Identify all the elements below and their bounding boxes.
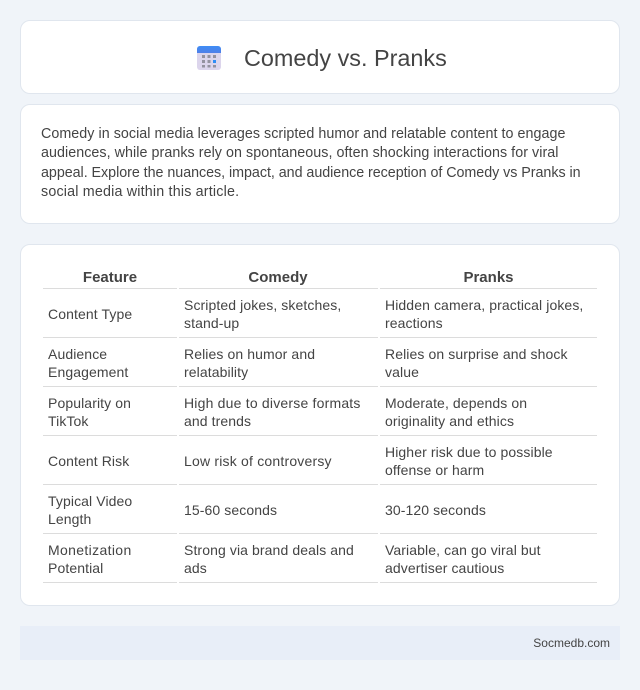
row: content risk: Content Risk: [48, 453, 129, 469]
row: audience engagement: [43, 346, 597, 387]
title: Comedy vs. Pranks: [244, 45, 447, 71]
row: popularity on tiktok: and trends: [184, 413, 251, 429]
text block: introduction: social media within this article.: [41, 184, 239, 200]
row: content type: Hidden camera, practical jokes,: [385, 297, 583, 313]
row: audience engagement: Audience: [48, 346, 107, 362]
row: typical video length: Length: [48, 511, 91, 527]
row: popularity on tiktok: TikTok: [48, 413, 89, 429]
table header row: Comedy: [248, 269, 308, 286]
footer text: Socmedb.com: [533, 636, 610, 650]
row: popularity on tiktok: High due to diverse formats: [184, 395, 361, 411]
row: typical video length: Typical Video: [48, 493, 132, 509]
panel: intro card: [20, 104, 620, 224]
row: typical video length: 15-60 seconds: [184, 502, 277, 518]
row: popularity on tiktok: originality and ethics: [385, 413, 514, 429]
panel: header card: [20, 20, 620, 94]
row: content risk: Higher risk due to possible: [385, 444, 553, 460]
row: content type: Content Type: [48, 306, 132, 322]
comparison table: [43, 269, 597, 583]
row: typical video length: [43, 493, 597, 534]
text block: introduction: audiences, while pranks rely on spontaneous, often shocking interactions for viral: [41, 145, 558, 161]
row: popularity on tiktok: Moderate, depends on: [385, 395, 527, 411]
row: monetization potential: Strong via brand deals and: [184, 542, 354, 558]
text block: introduction: [41, 126, 581, 200]
row: monetization potential: advertiser cautious: [385, 560, 504, 576]
row: content type: stand-up: [184, 315, 239, 331]
row: monetization potential: [43, 542, 597, 583]
row: content type: reactions: [385, 315, 443, 331]
row: monetization potential: Monetization: [48, 542, 132, 558]
row: popularity on tiktok: [43, 395, 597, 436]
footer bar: [20, 626, 620, 660]
text block: introduction: Comedy in social media leverages scripted humor and relatable content to engage: [41, 126, 566, 142]
icon: calendar: [197, 46, 221, 70]
table header row: Pranks: [463, 269, 514, 286]
row: monetization potential: Potential: [48, 560, 103, 576]
row: audience engagement: Engagement: [48, 364, 128, 380]
row: content risk: [43, 444, 597, 485]
row: content type: [43, 297, 597, 338]
row: monetization potential: Variable, can go viral but: [385, 542, 541, 558]
text block: introduction: appeal. Explore the nuances, impact, and audience reception of Comedy vs Pranks in: [41, 165, 581, 181]
row: audience engagement: value: [385, 364, 419, 380]
row: audience engagement: relatability: [184, 364, 248, 380]
table header row: Feature: [83, 269, 137, 286]
row: monetization potential: ads: [184, 560, 207, 576]
row: content risk: Low risk of controversy: [184, 453, 332, 469]
panel: comparison table card: [20, 244, 620, 606]
table header row: [43, 269, 597, 289]
row: audience engagement: Relies on humor and: [184, 346, 315, 362]
row: popularity on tiktok: Popularity on: [48, 395, 131, 411]
row: content type: Scripted jokes, sketches,: [184, 297, 341, 313]
row: typical video length: 30-120 seconds: [385, 502, 486, 518]
row: content risk: offense or harm: [385, 462, 484, 478]
row: audience engagement: Relies on surprise and shock: [385, 346, 568, 362]
